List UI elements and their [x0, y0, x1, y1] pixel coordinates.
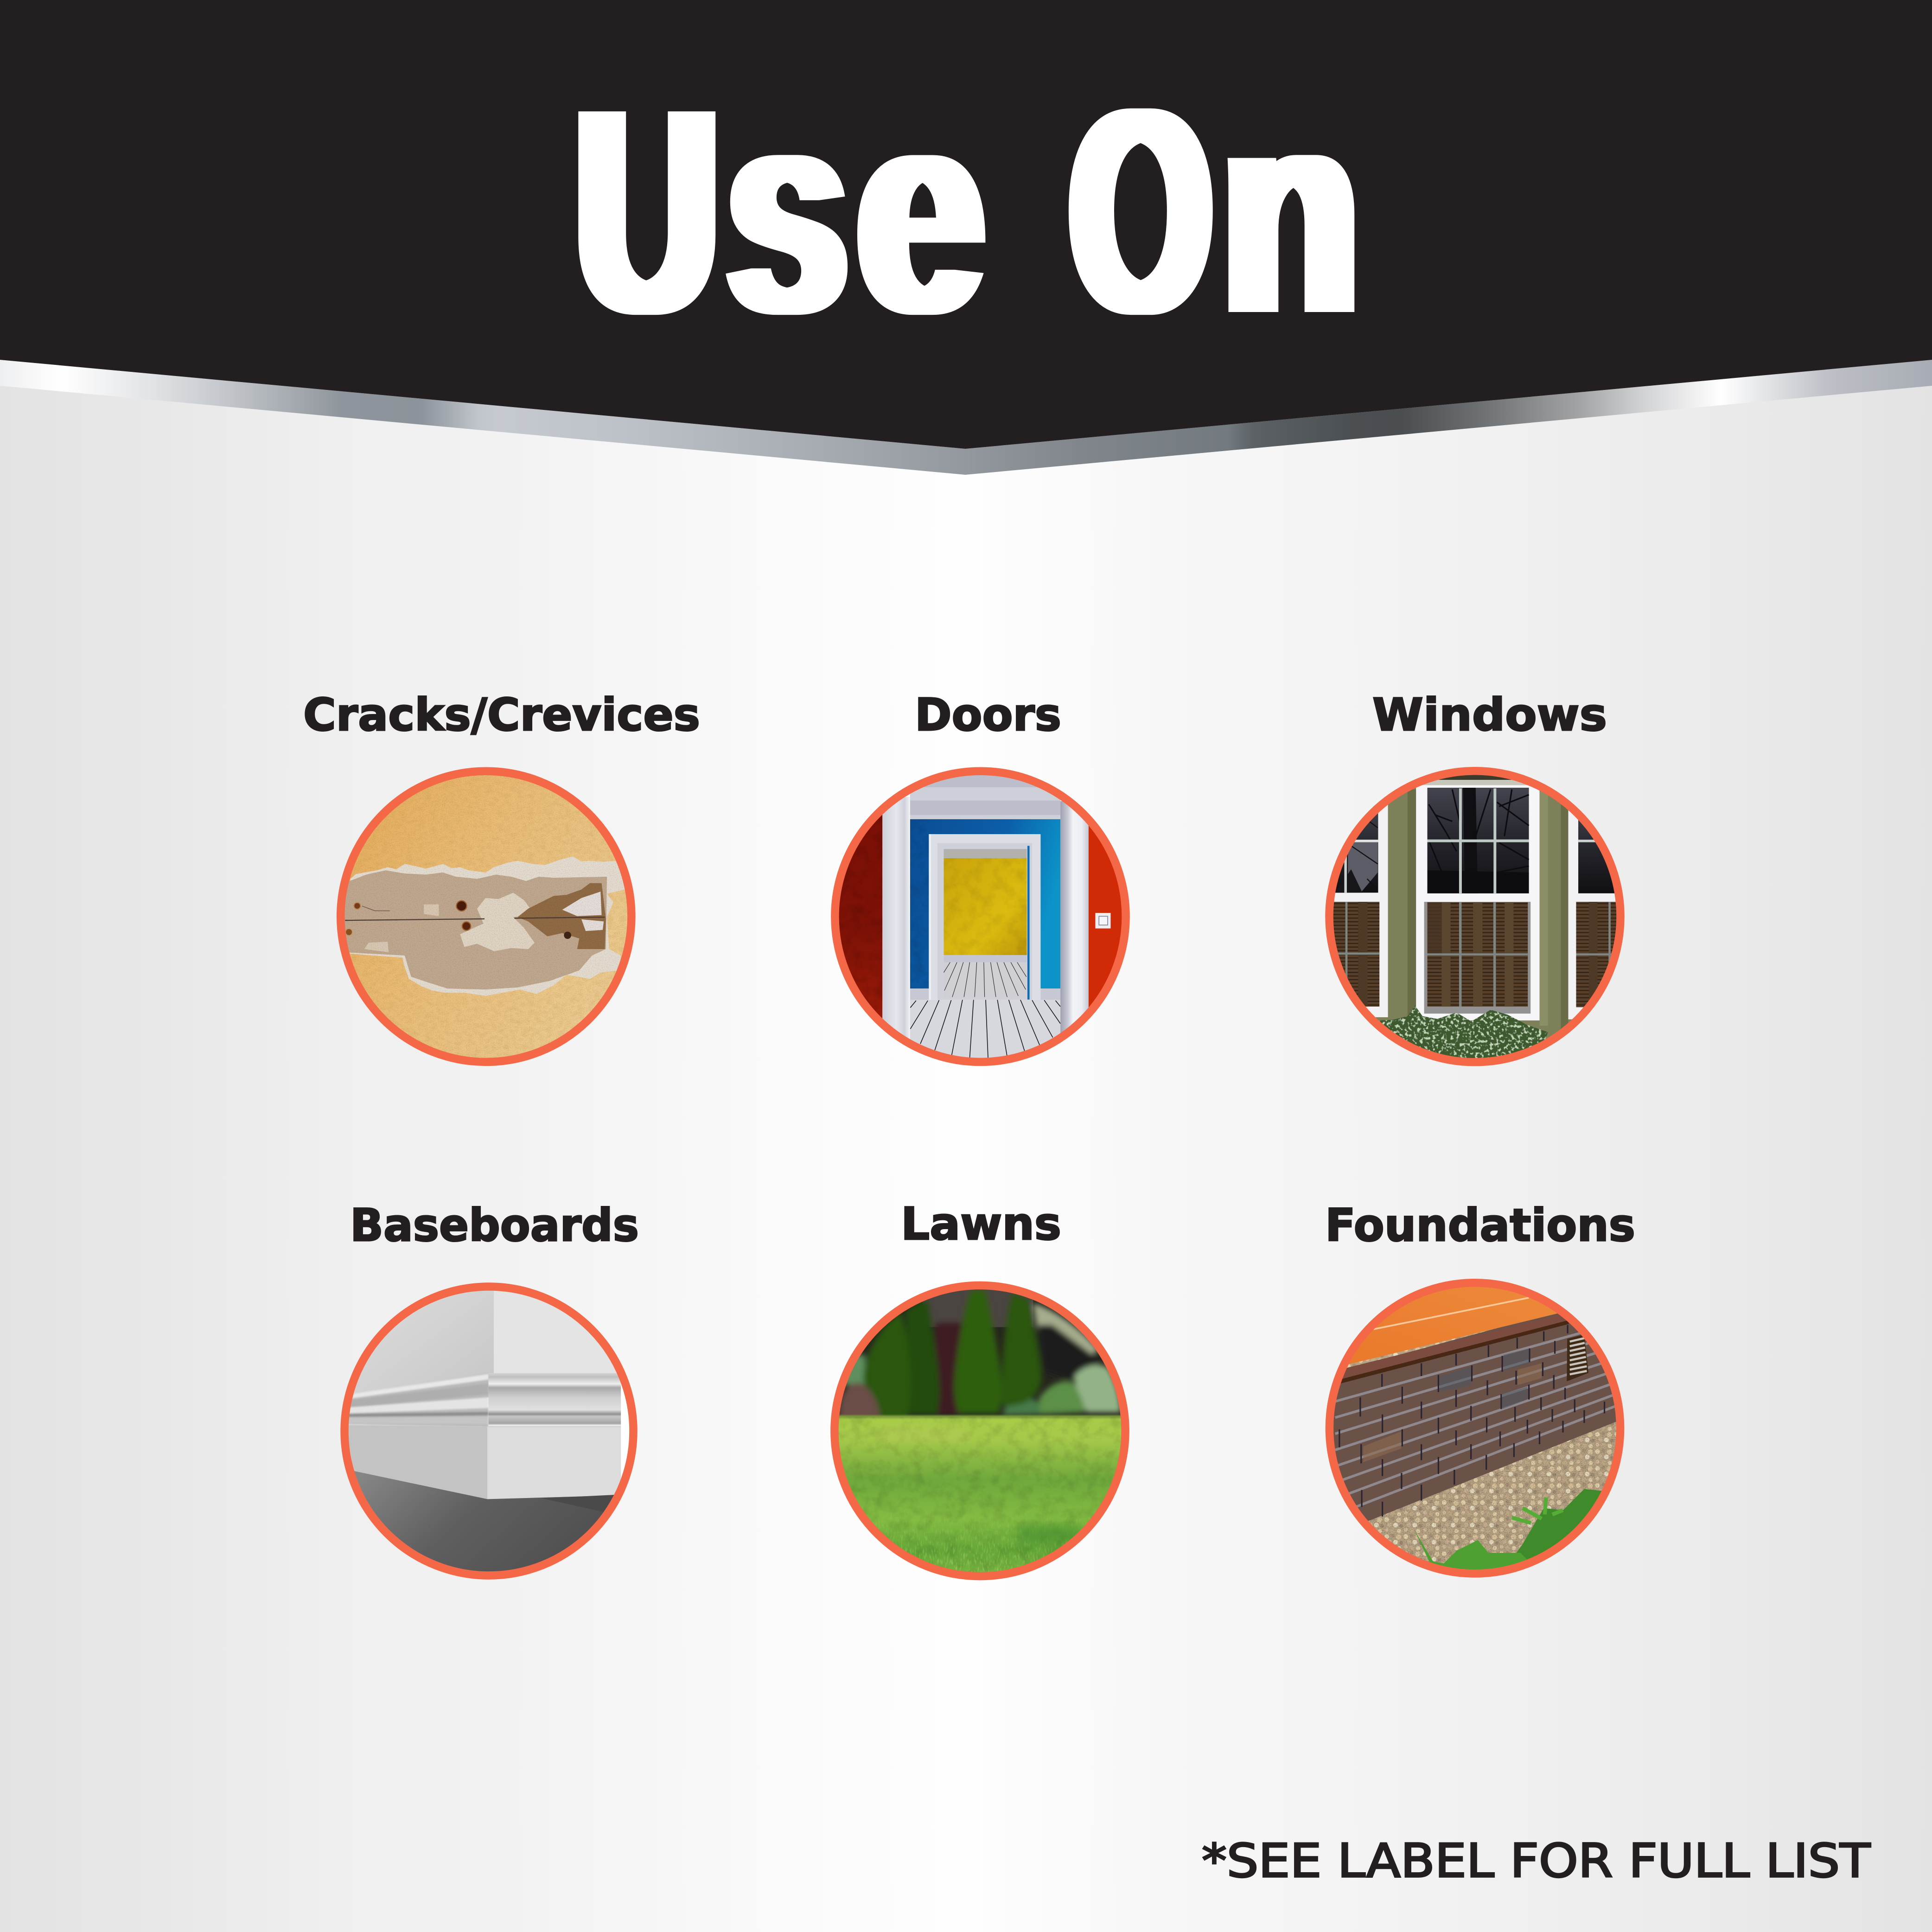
- label: Cracks/Crevices: Cracks/Crevices: [303, 689, 700, 741]
- title: s: [728, 49, 847, 374]
- grass: [1414, 1470, 1618, 1574]
- panel: Lawns: [835, 1198, 1125, 1576]
- title: U: [576, 49, 718, 374]
- photo: house windows: [1329, 770, 1624, 1064]
- title: O: [1071, 49, 1211, 374]
- ring: [341, 771, 631, 1062]
- label: Foundations: Foundations: [1325, 1199, 1635, 1251]
- ring: [1329, 1283, 1620, 1574]
- ring: [835, 1285, 1125, 1576]
- vent: [1567, 1334, 1588, 1381]
- label: Lawns: Lawns: [901, 1198, 1061, 1250]
- left window: [1329, 802, 1388, 1017]
- panel: Baseboards: [344, 1199, 639, 1575]
- ring: [835, 771, 1126, 1062]
- panel: Doors: [835, 689, 1126, 1063]
- header banner: [0, 0, 1932, 449]
- photo: baseboard corner: [346, 1287, 636, 1574]
- right window: [1568, 804, 1624, 1020]
- panel: Cracks/Crevices: [303, 689, 700, 1062]
- ring: [1329, 771, 1620, 1062]
- centre window: [1416, 780, 1540, 1020]
- photo: damaged wall crack: [341, 772, 631, 1062]
- photo: brick foundation: [1329, 1282, 1621, 1575]
- photo: green lawn with trees: [837, 1287, 1122, 1574]
- panel: Foundations: [1325, 1199, 1635, 1575]
- panel: Windows: [1329, 689, 1624, 1064]
- label: Baseboards: Baseboards: [350, 1199, 639, 1251]
- title: e: [858, 49, 983, 374]
- label: Windows: Windows: [1372, 689, 1607, 741]
- silver chevron band: [0, 360, 1932, 475]
- label: Doors: Doors: [915, 689, 1061, 741]
- title: n: [1223, 49, 1358, 374]
- shrub: [1378, 1006, 1548, 1064]
- footnote: *SEE LABEL FOR FULL LIST: [1202, 1834, 1871, 1888]
- title: [576, 49, 1358, 374]
- ring: [344, 1287, 633, 1575]
- photo: colourful doorways: [837, 772, 1125, 1063]
